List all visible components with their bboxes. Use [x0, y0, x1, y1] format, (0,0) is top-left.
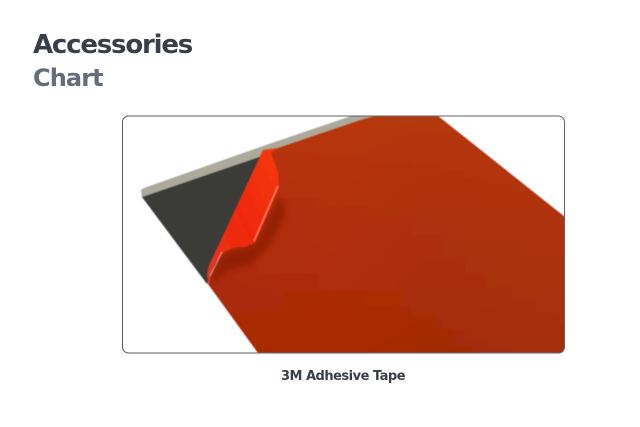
image frame	[122, 116, 564, 353]
title: Accessories	[33, 30, 192, 60]
shadow under peeled flap	[210, 195, 286, 285]
red tape liner	[208, 116, 565, 353]
peeled red flap	[207, 148, 279, 285]
subtitle: Chart	[33, 64, 103, 92]
black foam backing	[142, 156, 260, 284]
caption: 3M Adhesive Tape	[281, 369, 405, 384]
panel: product photo of adhesive tape	[122, 116, 565, 354]
grey foam edge	[141, 113, 375, 198]
